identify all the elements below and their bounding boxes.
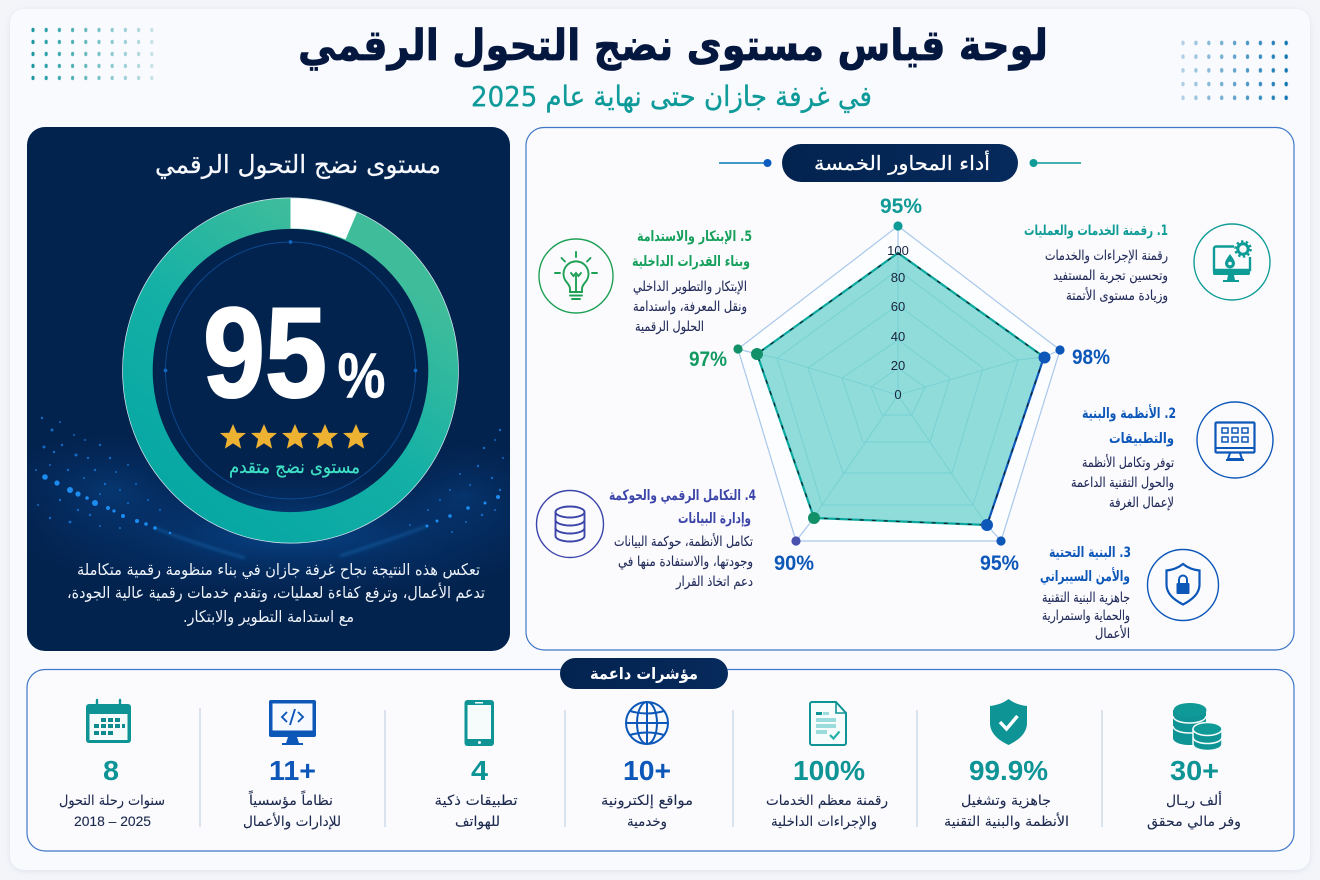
axis 1 text block: رقمنة الإجراءات والخدمات [1045,248,1168,264]
radar data outline [757,253,1044,518]
description paragraph: مع استدامة التطوير والابتكار. [183,607,354,627]
icon: monitor with gear [1194,224,1270,300]
axis 2 text block: توفر وتكامل الأنظمة [1082,454,1174,471]
radar axis scale: 100 [887,243,909,258]
axis 2 text block [1071,404,1176,511]
axis 5 text block: الحلول الرقمية [635,319,704,335]
indicator: websites [601,702,693,830]
score value: % [338,340,386,412]
pill heading: five axes [782,144,1018,182]
radar axis scale: 80 [891,270,905,285]
radar chart [733,221,1065,546]
indicator: websites: مواقع إلكترونية [601,793,693,809]
axis 2 text block: والتطبيقات [1109,431,1174,447]
title: لوحة قياس مستوى نضج التحول الرقمي [298,21,1048,71]
maturity level label: مستوى نضج متقدم [229,457,360,478]
decorative dots: top right [1181,40,1288,100]
indicator: financial savings: 30+ [1170,755,1219,786]
axis 2 text block: والحول التقنية الداعمة [1071,475,1174,491]
icon: coins [1173,703,1222,750]
indicator: systems readiness: جاهزية وتشغيل [961,793,1051,809]
score value: 95 [203,282,327,425]
radar axis scale: 0 [894,387,902,402]
indicator: years of journey: سنوات رحلة التحول [59,793,165,809]
radar axis scale [887,243,909,402]
stars rating [220,424,369,449]
value: axis 1 98%: 98% [1072,346,1110,369]
axis 3 text block: والحماية واستمرارية [1042,608,1130,624]
value: axis 2 95%: 95% [980,552,1019,575]
icon: calendar [86,700,131,743]
decorative dots: top left [31,28,154,80]
description paragraph: تعكس هذه النتيجة نجاح غرفة جازان في بناء منظومة رقمية متكاملة [77,560,480,580]
axis 4 text block: وإدارة البيانات [678,511,751,527]
axis 5 text block: 5. الإبتكار والاستدامة [637,229,752,245]
radar connectors [738,226,1060,541]
heading connector right [1030,159,1081,167]
indicator: institutional systems [243,700,341,830]
indicator: services digitization [766,702,888,830]
axis 3 text block [1040,545,1131,642]
pill heading: supporting indicators: مؤشرات داعمة [590,664,698,683]
heading connector left [719,159,772,167]
icon: database [536,490,604,558]
indicator: institutional systems: نظاماً مؤسسياً [248,790,333,809]
icon: code monitor [269,700,316,745]
axis 4 text block [609,488,756,590]
value: axis top 95%: 95% [880,195,922,218]
particle glow background [35,416,510,582]
radar axis scale: 60 [891,299,905,314]
panel: supporting indicators [27,658,1294,851]
indicator: systems readiness: الأنظمة والبنية التقنية [944,812,1069,830]
axis 5 text block: الإبتكار والتطوير الداخلي [633,279,747,295]
indicator: services digitization: رقمنة معظم الخدمات [766,793,888,809]
icon: light bulb [539,239,613,313]
indicator: financial savings [1147,703,1241,830]
radar points [733,221,1065,546]
axis 1 text block: وزيادة مستوى الأتمتة [1066,287,1168,304]
donut gauge [123,198,458,543]
radar outer frame [738,226,1060,541]
axis 5 text block [632,229,752,335]
indicator: years of journey [59,700,165,829]
description paragraph: تدعم الأعمال، وترفع كفاءة لعمليات، وتقدم خدمات رقمية عالية الجودة، [67,582,485,603]
indicator: mobile apps: 4 [471,755,488,786]
axis 4 text block: وجودتها، والاستفادة منها في [618,554,753,570]
panel heading: مستوى نضج التحول الرقمي [155,150,441,180]
icon: document [810,702,846,745]
indicator: systems readiness: 99.9% [969,755,1048,786]
radar axis scale: 20 [891,358,905,373]
icon: globe [626,702,668,744]
axis 4 text block: تكامل الأنظمة، حوكمة البيانات [614,533,753,550]
axis 4 text block: دعم اتخاذ القرار [675,574,753,590]
pill heading: five axes: أداء المحاور الخمسة [814,151,990,175]
indicator: services digitization: 100% [793,755,865,786]
axis 1 text block [1024,223,1168,304]
icon: phone [464,700,494,746]
description paragraph [67,560,485,627]
axis 2 text block: 2. الأنظمة والبنية [1082,404,1176,422]
axis 5 text block: ونقل المعرفة، واستدامة [633,299,747,315]
panel: maturity score [27,127,510,651]
radar data area [757,253,1044,525]
radar axis scale: 40 [891,329,905,344]
indicator: institutional systems: للإدارات والأعمال [243,812,341,830]
indicator: financial savings: ألف ريـال [1166,791,1222,809]
indicator: services digitization: والإجراءات الداخلية [771,814,877,830]
indicator: websites: وخدمية [627,814,667,830]
axis 3 text block: والأمن السيبراني [1040,567,1130,585]
icon: monitor with grid [1197,402,1273,478]
icon: shield check [990,699,1027,745]
axis 1 text block: وتحسين تجربة المستفيد [1053,268,1168,284]
axis 3 text block: الأعمال [1095,625,1130,642]
axis 4 text block: 4. التكامل الرقمي والحوكمة [609,488,756,504]
indicator: years of journey: 8 [103,755,119,786]
axis 2 text block: لإعمال الغرفة [1109,495,1174,511]
indicator: institutional systems: 11+ [269,755,316,786]
indicator: mobile apps: تطبيقات ذكية [434,793,518,809]
value: axis 3 90%: 90% [774,552,814,575]
axis 5 text block: وبناء القدرات الداخلية [632,254,750,270]
indicator: websites: 10+ [623,755,671,786]
subtitle: في غرفة جازان حتى نهاية عام 2025 [471,80,872,113]
value: axis 5 97%: 97% [689,348,727,371]
indicator: mobile apps [434,700,518,830]
panel: five axes performance [526,128,1294,650]
pill heading: supporting indicators [560,658,728,689]
axis 3 text block: 3. البنية التحتية [1049,545,1131,561]
axis 3 text block: جاهزية البنية التقنية [1042,590,1130,606]
indicator: mobile apps: للهواتف [455,814,500,830]
icon: shield with lock [1148,550,1218,620]
axis 1 text block: 1. رقمنة الخدمات والعمليات [1024,223,1168,239]
indicator: financial savings: وفر مالي محقق [1147,814,1241,830]
radar grid [757,253,1044,525]
indicator: systems readiness [944,699,1069,830]
indicator: years of journey: 2018 – 2025 [74,813,151,829]
